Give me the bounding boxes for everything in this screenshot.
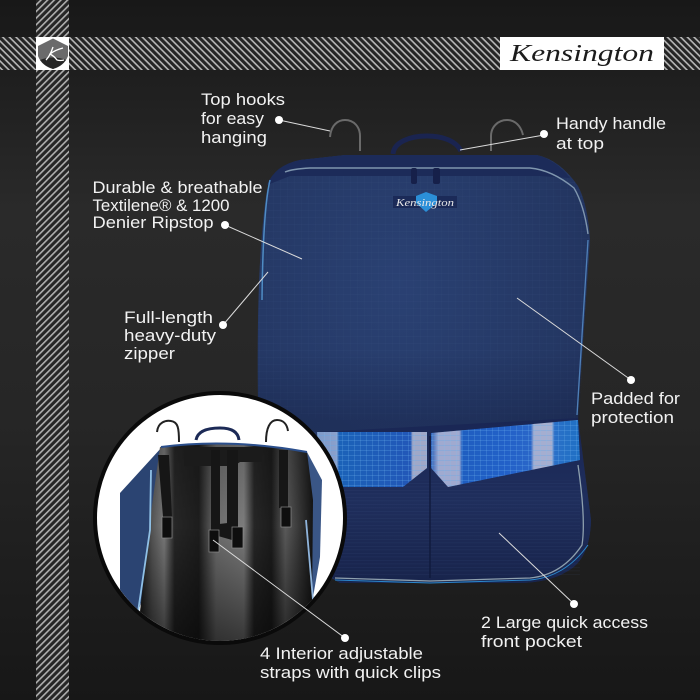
callout: top hooks — [201, 90, 285, 147]
inset left wing — [120, 447, 162, 612]
callout: front pocket: front pocket — [481, 632, 582, 651]
hook: left — [330, 120, 360, 151]
inset right wing — [307, 452, 322, 603]
inset top webbing — [202, 447, 254, 466]
callout: top hooks: for easy — [201, 109, 265, 128]
callout: interior straps: 4 Interior adjustable — [260, 644, 423, 663]
callout: padded — [591, 389, 680, 427]
plaid flap: left — [317, 432, 427, 487]
logo: Kensington wordmark — [500, 37, 664, 70]
handle — [393, 136, 461, 154]
inset buckles — [162, 507, 291, 552]
zipper pulls — [411, 168, 440, 184]
inset handle — [196, 428, 239, 440]
ripstop texture — [258, 155, 590, 420]
callout: handle: Handy handle — [556, 114, 666, 133]
lower shade — [258, 165, 590, 432]
callout: zipper: Full-length — [124, 308, 213, 327]
plaid flap: right — [431, 420, 580, 487]
inset top edge — [161, 443, 307, 452]
callout: material: Textilene® & 1200 — [92, 196, 230, 215]
inset interior lining — [140, 443, 313, 650]
callout: zipper: heavy-duty — [124, 326, 217, 345]
callout: front pocket: 2 Large quick access — [481, 613, 648, 632]
zipper top — [285, 168, 588, 234]
callout: padded: Padded for — [591, 389, 680, 408]
inset straps — [158, 450, 288, 540]
pocket piping — [335, 465, 583, 581]
callout: material — [92, 178, 262, 232]
zipper left — [262, 180, 270, 300]
callout: handle: at top — [556, 134, 604, 153]
inset zipper trim — [138, 470, 151, 612]
badge — [393, 192, 457, 212]
hook: right — [491, 120, 523, 151]
callout: zipper — [124, 308, 217, 363]
top gusset — [267, 155, 570, 185]
leader lines — [213, 120, 631, 638]
callout: material: Denier Ripstop — [92, 213, 214, 232]
icon: K shield logo — [36, 37, 69, 70]
callout: interior straps — [260, 644, 441, 682]
callout: zipper: zipper — [124, 344, 175, 363]
front pocket — [310, 418, 591, 583]
decorative horizontal hatched band — [0, 37, 700, 70]
callout: top hooks: hanging — [201, 128, 267, 147]
inset hooks — [157, 421, 179, 442]
pocket seam — [429, 436, 431, 578]
decorative vertical hatched band — [36, 0, 69, 700]
callout: front pocket — [481, 613, 648, 651]
badge: Kensington — [395, 197, 455, 209]
callout dots — [219, 116, 635, 642]
callout: handle — [556, 114, 666, 153]
inset circle: interior view — [95, 393, 345, 650]
callout: material: Durable & breathable — [92, 178, 262, 197]
callout: padded: protection — [591, 408, 674, 427]
logo: Kensington wordmark: Kensington — [509, 41, 654, 67]
right side zipper — [577, 240, 588, 415]
callout: top hooks: Top hooks — [201, 90, 285, 109]
callout: interior straps: straps with quick clips — [260, 663, 441, 682]
garment bag — [258, 120, 591, 583]
bag body — [258, 155, 591, 583]
